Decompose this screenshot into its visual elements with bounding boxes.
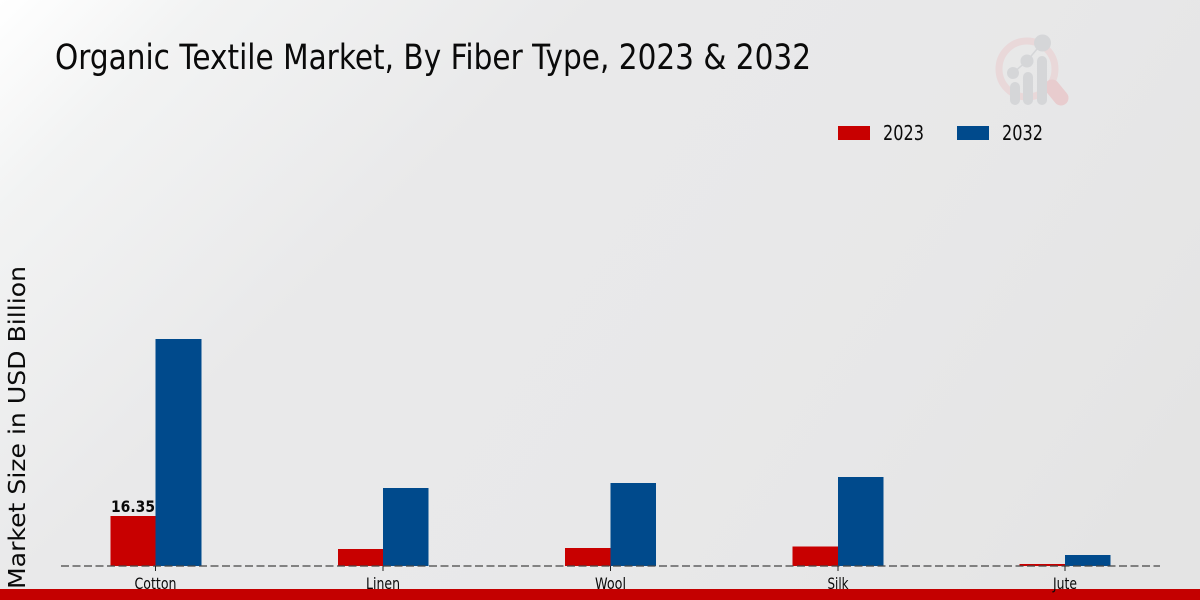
tick marks [156, 566, 1065, 571]
category labels: Cotton [134, 574, 176, 593]
value label: 16.35 [111, 497, 155, 516]
linen bars [338, 488, 428, 566]
jute bars [1020, 555, 1110, 566]
legend: 2023: 2023 [883, 121, 924, 145]
category labels: Wool [595, 574, 626, 593]
legend: 2032 [957, 121, 1043, 145]
legend [838, 121, 1043, 145]
title: Organic Textile Market, By Fiber Type, 2023 & 2032 [55, 38, 811, 78]
category labels: Silk [828, 574, 849, 593]
wool bars [565, 483, 656, 566]
baseline [61, 565, 1160, 567]
bar chart [61, 339, 1160, 571]
silk bars [792, 477, 884, 566]
legend: 2023 [838, 121, 924, 145]
legend: 2032: 2032 [1002, 121, 1043, 145]
category labels: Jute [1052, 574, 1077, 593]
footer bar [0, 589, 1200, 600]
icon: magnifier logo watermark [999, 34, 1061, 105]
y axis label: Market Size in USD Billion [5, 266, 31, 589]
category labels: Linen [366, 574, 400, 593]
category labels [134, 574, 1077, 593]
cotton bars [110, 339, 202, 566]
